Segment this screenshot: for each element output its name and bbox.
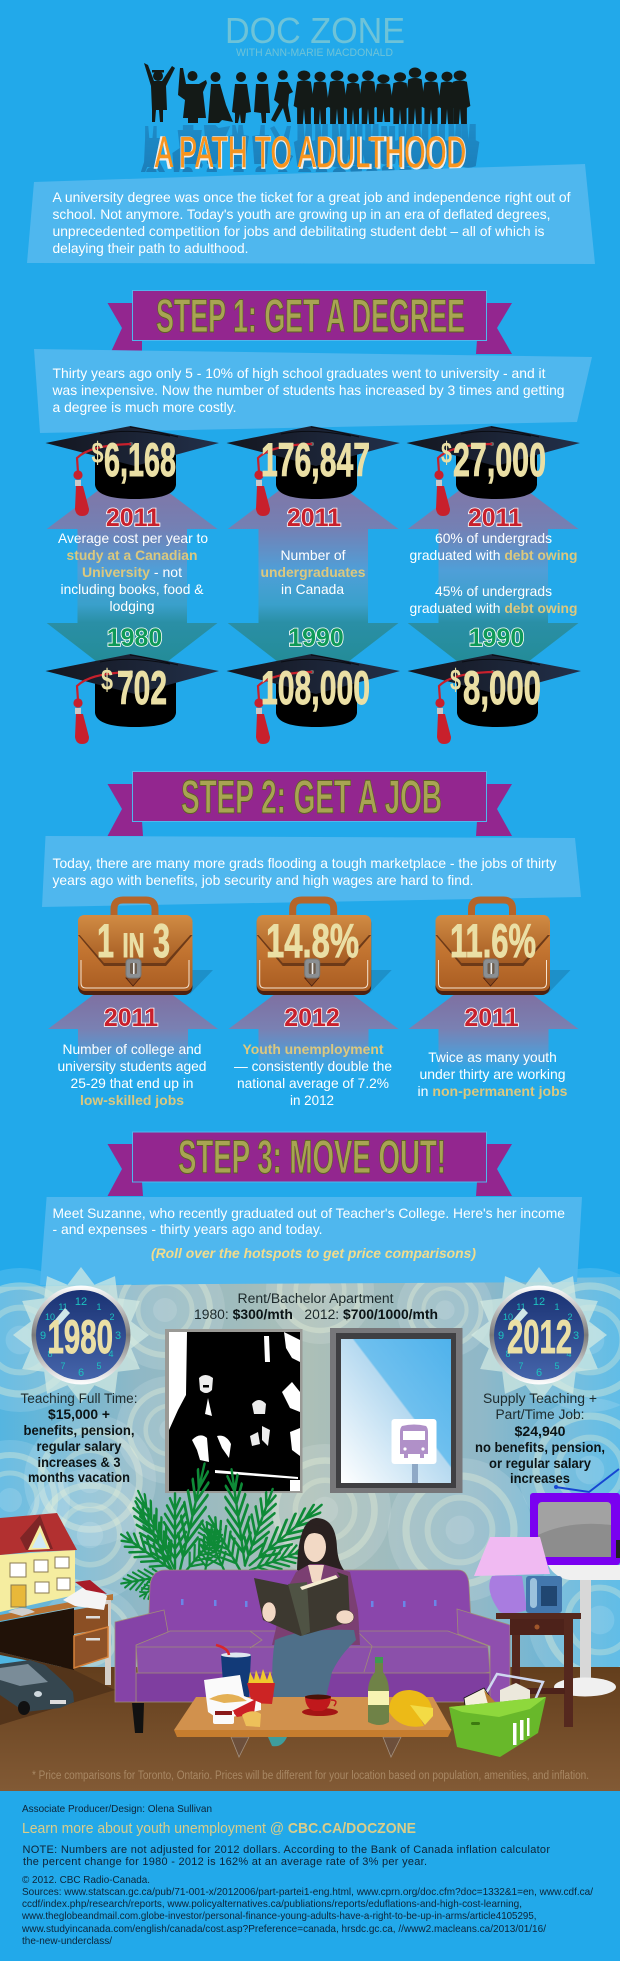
credits and sources: NOTE: Numbers are not adjusted for 2012 dollars. According to the Bank of Canada inflation calculator [22,1844,550,1856]
stat column: non-permanent jobs: under thirty are working [420,1066,566,1082]
credits and sources: the-new-underclass/ [22,1935,112,1947]
banner: step 1 [108,289,512,354]
text: 2012 income: Supply Teaching + [483,1391,597,1406]
banner: step 2 [108,770,512,836]
room: wallpaper [0,1236,620,1694]
stat column: student debt: graduated with debt owing [410,600,578,616]
stat column: cost per year: 2011 [106,504,160,532]
credits and sources [21,1803,593,1947]
text: 1980 income [20,1391,138,1485]
teacup [302,1694,338,1716]
stat column: student debt: 27,000 [453,434,546,487]
panel: step 3 text: (Roll over the hotspots to get price comparisons) [151,1245,476,1261]
stat column: cost per year: 1980 [107,624,162,652]
dollhouse on a desk [0,1513,115,1725]
text: 1980 income: months vacation [28,1470,130,1485]
stat column: undergraduates: 108,000 [261,662,370,715]
stat column: non-permanent jobs: in non-permanent jobs [418,1083,568,1099]
clock: 1980 [13,1267,149,1403]
stat column: youth unemployment: 2012 [284,1004,340,1032]
text: rent comparison [194,1291,438,1322]
credits and sources: Sources: www.statscan.gc.ca/pub/71-001-x/2012006/part-partei1-eng.html, www.cprn.org/doc.cfm?doc=1332&1=en, www.cdf.ca/ [22,1886,593,1898]
stat column: undergraduates: Number of [280,547,346,563]
stat column: student debt: graduated with debt owing [410,547,578,563]
stat column: undergraduates: undergraduates [260,564,366,580]
text: 1980 income: regular salary [36,1439,122,1454]
stat column: youth unemployment: national average of 7.2% [237,1075,389,1091]
panel: step 3 text: Meet Suzanne, who recently graduated out of Teacher's College. Here's her income [52,1205,565,1221]
stat column: youth unemployment: Youth unemployment [242,1041,384,1057]
reflection of the crowd [141,124,480,172]
stat column: cost per year: $ [101,664,113,697]
stat column: non-permanent jobs: 11.6% [450,915,536,968]
stat column: cost per year: lodging [110,598,154,614]
banner: step 3 [108,1130,512,1196]
logo: Doc Zone: WITH ANN-MARIE MACDONALD [236,47,393,59]
clock: 2012: 2012 [507,1311,572,1364]
arrows: 2011 to 1980/1990 comparisons [47,465,578,689]
stat column: youth unemployment: 14.8% [266,915,359,968]
silhouettes of graduates and young adults [144,63,470,124]
stat column: cost per year: including books, food & [60,581,204,597]
stat column: cost per year: Average cost per year to [58,530,208,546]
stat column: low-skilled jobs: Number of college and [62,1041,202,1057]
stat column: cost per year: 702 [117,662,167,715]
stat column: low-skilled jobs: university students aged [58,1058,206,1074]
credits and sources: Associate Producer/Design: Olena Sullivan [22,1803,212,1815]
text: 2012 income [475,1391,605,1486]
stat column: low-skilled jobs [48,900,218,1108]
stat column: cost per year: $ [92,437,104,470]
wine bottle and cheese [368,1657,433,1727]
panel: intro: A university degree was once the ticket for a great job and independence right out of [52,189,571,205]
text: 2012 income: no benefits, pension, [475,1440,605,1455]
text: 2012 income: $24,940 [514,1424,566,1439]
credits and sources: www.theglobeandmail.com.globe-investor/personal-finance-young-adults-have-a-right-to-be-up-in-arms/article4105295, [21,1910,536,1922]
credits and sources: www.studyincanada.com/english/canada/cost.asp?Preference=canada, hrsdc.gc.ca, //www2.macleans.ca/2013/01/16/ [21,1923,546,1935]
Suzanne reading [254,1518,360,1746]
panel: step 1 text: was inexpensive. Now the number of students has increased by 3 times and getting [52,382,564,398]
stat column: student debt: $ [450,664,461,697]
room: floor [0,1667,620,1791]
panel: step 1 text: a degree is much more costly. [52,399,236,415]
clock: 2012 [471,1267,607,1403]
stat column: undergraduates: 2011 [287,504,341,532]
stat column: low-skilled jobs: 25-29 that end up in [70,1075,194,1091]
text: rent comparison: Rent/Bachelor Apartment [238,1291,394,1306]
stat column: undergraduates [226,426,400,744]
stat column: cost per year [46,426,219,744]
panel: step 2 text [42,836,581,907]
picture: film still, 1980 [165,1329,302,1493]
credits and sources: © 2012. CBC Radio-Canada. [22,1874,150,1886]
stat column: non-permanent jobs: 2011 [464,1004,519,1032]
panel: intro [27,164,595,264]
panel: step 1 text [34,349,592,433]
stat column: cost per year: University - not [82,564,182,580]
television on a round table [530,1469,620,1696]
credits and sources: ccdf/index.php/research/reports, www.policyalternatives.ca/publiations/reports/eduflations-and-high-cost-learning, [22,1898,522,1910]
stat column: low-skilled jobs: 2011 [104,1004,158,1032]
text: 2012 income: increases [510,1471,570,1486]
stat column: undergraduates: in Canada [281,581,344,597]
panel: intro: delaying their path to adulthood. [52,240,248,256]
text: rent comparison: 1980: $300/mth 2012: $700/1000/mth [194,1307,438,1322]
grocery basket [449,1674,546,1757]
banner: step 2: STEP 2: GET A JOB [181,770,442,823]
fast food meal [204,1645,275,1727]
plants behind the sofa [115,1462,328,1604]
text: 1980 income: increases & 3 [38,1455,121,1470]
clock: 1980: 1980 [48,1311,113,1364]
stat column: student debt: 2011 [468,504,522,532]
panel: intro: unprecedented competition for jobs and debilitating student debt – all of which is [52,223,544,239]
coffee table [174,1697,452,1757]
text: 1980 income: benefits, pension, [24,1423,134,1438]
stat column: youth unemployment [228,900,398,1108]
stat column: cost per year: study at a Canadian [66,547,198,563]
panel: step 3 text: - and expenses - thirty years ago and today. [52,1221,322,1237]
title [153,126,467,179]
car [0,1655,74,1715]
panel: step 1 text: Thirty years ago only 5 - 10% of high school graduates went to university - and it [52,365,546,381]
panel: step 3 text [40,1197,582,1285]
stat column: student debt: 8,000 [463,662,541,715]
stat column: non-permanent jobs: Twice as many youth [428,1049,557,1065]
sofa [115,1570,510,1733]
stat column: student debt: 45% of undergrads [435,583,552,599]
stat column: cost per year: 6,168 [104,434,176,487]
text: 2012 income: or regular salary [489,1456,591,1471]
stat column: student debt: $ [441,437,452,470]
stat column: student debt: 1990 [469,624,524,652]
text: 2012 income: Part/Time Job: [496,1407,584,1422]
panel: step 2 text: Today, there are many more grads flooding a tough marketplace - the jobs of thirty [52,855,556,871]
credits and sources: the percent change for 1980 - 2012 is 162% at an average rate of 3% per year. [23,1856,427,1868]
credits and sources: Learn more about youth unemployment @ CBC.CA/DOCZONE [22,1820,416,1837]
stat column: low-skilled jobs: low-skilled jobs [80,1092,184,1108]
stat column: undergraduates: 1990 [288,624,344,652]
stat column: low-skilled jobs: 1 IN 3 [97,915,170,968]
logo: Doc Zone: DOC ZONE [225,10,405,51]
stat column: non-permanent jobs [408,900,578,1099]
side table with lamp and phone [474,1537,581,1727]
stat column: youth unemployment: in 2012 [290,1092,334,1108]
text: 1980 income: Teaching Full Time: [20,1391,138,1406]
stat column: student debt: 60% of undergrads [435,530,552,546]
picture: window with bus stop, 2012 [330,1328,462,1493]
panel: intro: school. Not anymore. Today's youth are growing up in an era of deflated degrees, [52,206,550,222]
stat column: undergraduates: 176,847 [261,434,370,487]
text: 1980 income: $15,000 + [48,1407,110,1422]
stat column: student debt [406,426,581,744]
stat column: youth unemployment: — consistently double the [234,1058,392,1074]
panel: step 2 text: years ago with benefits, job security and high wages are hard to find. [52,872,474,888]
